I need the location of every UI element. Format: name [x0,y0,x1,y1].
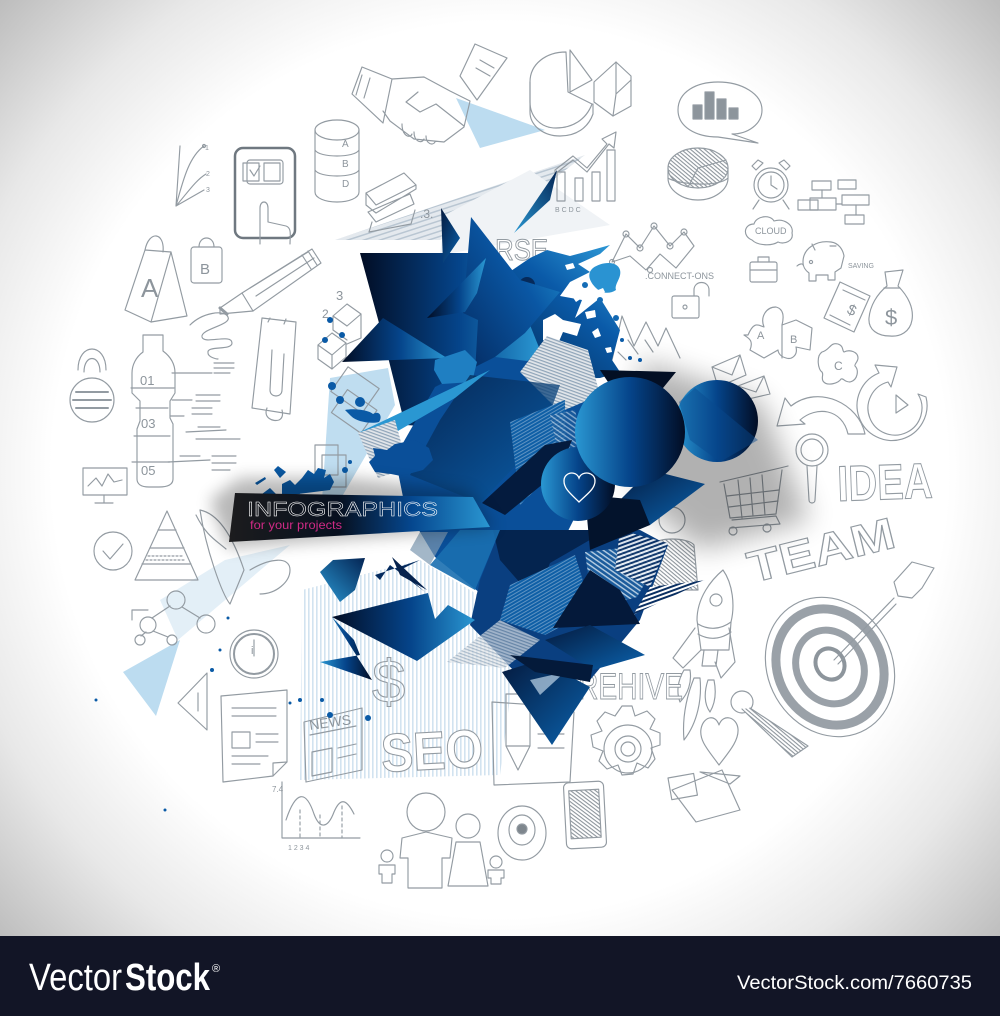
icon: person sketch [652,507,698,590]
icon: document [221,690,287,782]
icon: heart [701,718,738,765]
grey hatched panel near splatter [520,336,600,412]
icon: shopping bag B: B [200,261,210,278]
fine striped shard [633,580,707,615]
icon: zigzag mountains [612,316,680,360]
icon: growth curves: 2 [206,171,210,178]
icon: shopping bag A: A [141,273,159,303]
dark band [510,655,593,682]
logo wordmark: ® [212,963,220,975]
icon: growth curves [176,144,210,206]
icon: rocket [673,570,735,740]
dark wedge behind circles [600,370,676,404]
icon: bottle with numbered layers: 03 [141,416,155,431]
icon: gear [591,706,660,775]
footer bar [0,936,1000,1016]
icon: open lock [672,282,709,318]
inner fold shard [427,258,486,318]
icon: jigsaw puzzle: B [790,334,797,346]
tall star shard [463,217,560,373]
small annotation: number labels near books: .3. [420,207,433,221]
icon: triangle play arrow [178,673,207,730]
icon: cloud label: CLOUD [755,226,787,236]
icon: squiggle line [190,313,232,359]
dark shard under banner [493,530,607,600]
large wing left [332,593,475,661]
icon: growth curves: 3 [206,187,210,194]
icon: recycle arrow [857,365,927,440]
icon: bottle with numbered layers [131,335,175,487]
dark arrow shard [610,470,705,525]
icon: magnifier [796,434,828,503]
pale blue fan shapes behind the doodles [123,98,610,780]
chart: line graph sketch [272,782,360,852]
icon: curved arrow [777,397,865,434]
icon: connections network [610,223,714,281]
blue ink blob [369,440,433,476]
icon: bottle with numbered layers: 05 [141,463,155,478]
icon: database stack: A [342,139,349,150]
list: numbered bullet lines [168,363,240,470]
panel: hand-drawn doodles ring [70,44,934,888]
icon: money bag [869,270,912,336]
icon: handshake [352,44,507,144]
icon: puzzle piece [818,344,858,384]
heading: SEO doodle: SEO [379,719,484,784]
heading: TARGET doodle behind shards: ARSE [478,234,548,267]
icon: jigsaw puzzle [744,307,812,358]
icon: paper sketches left of centre [315,367,379,487]
icon: banknote: $ [844,301,860,320]
heading: IDEA doodle: IDEA [836,453,933,512]
icon: newspaper: NEWS [308,711,352,733]
pale blue streak [360,370,490,446]
icon: necktie [731,691,808,757]
icon: pencil [220,249,321,314]
spread wing shard [342,318,447,362]
icon: database stack: D [342,179,349,190]
icon: shopping bag B [191,238,222,283]
icon: shopping cart [720,466,788,535]
icon: cloud label [745,217,792,245]
icon: family of people [379,793,504,888]
icon: money bag: $ [885,305,897,330]
logo wordmark: Stock [125,957,211,999]
icon: growth curves: 1 [205,145,209,152]
logo wordmark: Vector [29,957,122,999]
icon: padlock [70,349,114,422]
heading: TEAM doodle: TEAM [743,509,900,593]
icon: org chart [132,591,215,645]
icon: stacked cubes [318,288,361,369]
panel: central abstract shard cluster [94,170,707,812]
blue shards under banner [430,530,500,590]
icon: wallet and papers [668,770,740,822]
icon: stacked cubes: 3 [336,288,343,303]
white specks in splatter [543,263,612,353]
light fold [434,350,477,384]
icon: envelopes [712,355,770,400]
icon: coffee cup [498,806,546,860]
icon: banknote [824,282,870,332]
small lower left shard [320,558,365,602]
icon: newspaper [304,708,362,782]
icon: connections network: .CONNECT-ONS [645,271,714,281]
lower blue underlay [470,530,668,680]
small top shard [441,208,460,263]
title: INFOGRAPHICS [247,499,438,521]
translucent pale hatch [447,620,540,668]
image id: VectorStock.com/7660735 [737,973,972,994]
icon: database stack [315,120,359,202]
icon: alarm clock [752,160,790,209]
icon: pencil on paper [492,694,574,785]
lower left wing [320,617,372,680]
icon: tablet with pointing hand [235,148,295,244]
chart: line graph sketch: 7.4 [272,785,284,794]
chart: line graph sketch: 1 2 3 4 [288,845,310,852]
circle: large [575,377,685,487]
icon: helmet sketch at left [196,510,290,604]
panel: title banner [210,478,495,548]
icon: target with arrow [740,562,934,760]
icon: wall clock: i [251,645,253,657]
icon: heart [564,473,595,502]
hatched triangle cluster [585,543,668,610]
icon: dollar sign sketch: $ [372,648,405,715]
icon: piggy bank: SAVING [848,263,874,270]
icon: monitor [83,468,127,503]
icon: bottle with numbered layers: 01 [140,373,154,388]
icon: small pie chart [668,148,728,200]
hatched wedge mid [510,400,566,505]
icon: wall clock [230,630,278,678]
ink splatter upper right [500,245,642,380]
banner ribbon [229,493,490,542]
subtitle: for your projects [250,518,342,532]
chart: bar chart with arrow [555,132,616,214]
icon: puzzle piece: C [834,359,843,373]
small dark dart [392,557,427,590]
central mass [395,357,605,597]
icon: pyramid [135,511,198,580]
large dark shard [360,253,540,430]
chart: bar chart with arrow: B C D C [555,207,581,214]
icon: shopping bag A [125,236,187,322]
dark stripe to small circle [482,440,572,515]
circle: small with heart icon [541,447,615,521]
splatter left of banner [94,317,381,812]
dark wedge mid [410,375,560,503]
hatched mid block [500,555,592,635]
icon: usb drive [252,318,296,420]
icon: flowchart [798,180,869,224]
icon: 3d pie chart [530,50,631,136]
grey hatched panel [358,420,408,478]
icon: smartphone [563,781,607,849]
circle: right [676,380,758,462]
heading: CREATIVE doodle: REHIVE [578,666,683,707]
icon: stacked cubes: 2 [322,307,329,321]
dark shard low right [545,625,645,670]
icon: check circle [94,532,132,570]
bottom shard [502,660,590,745]
dark shard right [553,570,640,628]
icon: stack of books [366,173,416,232]
icon: briefcase [750,257,777,282]
top right shard [514,170,557,233]
icon: piggy bank [797,242,874,281]
icon: speech bubble with bars [678,82,762,143]
shadow behind circles [640,360,810,550]
icon: database stack: B [342,159,349,170]
icon: jigsaw puzzle: A [757,330,765,342]
